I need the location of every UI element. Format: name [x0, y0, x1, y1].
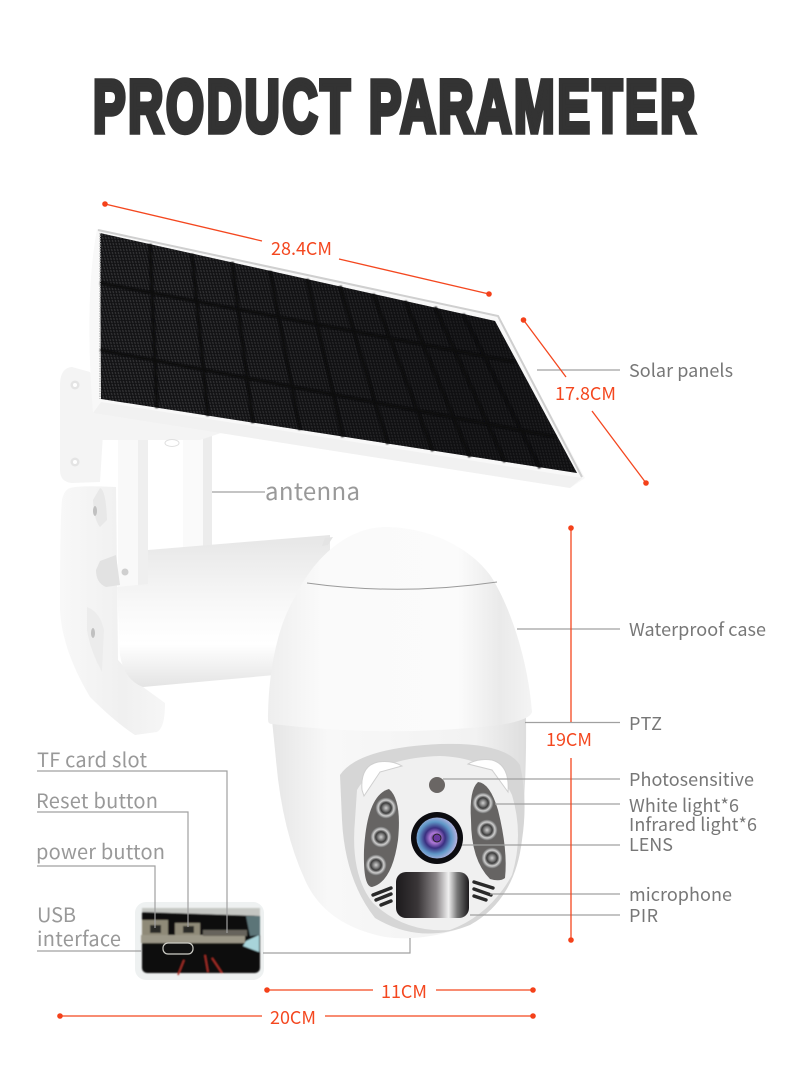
label: Solar panels: Solar panels	[629, 357, 733, 383]
PIR window	[396, 872, 469, 918]
dimension: panel depth 17.8CM: 17.8CM	[555, 380, 616, 406]
camera head	[268, 527, 532, 938]
buttons and slot	[142, 920, 247, 936]
solar cells	[100, 233, 577, 473]
label: USB interface: USB	[37, 899, 76, 928]
leader lines	[37, 370, 620, 953]
left LED strip	[364, 789, 399, 887]
photosensitive sensor	[429, 777, 445, 793]
dimension: height 19CM: 19CM	[546, 726, 592, 752]
face recess	[340, 744, 525, 934]
right LED strip	[471, 782, 506, 880]
dimension: panel depth 17.8CM	[521, 317, 649, 486]
dimension: total width 20CM	[57, 1004, 536, 1030]
antenna and pole	[100, 410, 230, 590]
label: White light: White light*6	[629, 792, 739, 818]
dimension: head width 11CM: 11CM	[381, 978, 427, 1004]
label: PIR: PIR	[629, 902, 658, 928]
label: microphone: microphone	[629, 881, 732, 907]
label: antenna: antenna	[265, 472, 360, 507]
dimension: head width 11CM	[264, 978, 536, 1004]
label: Reset button: Reset button	[36, 785, 158, 814]
wires	[178, 955, 222, 975]
label: Infrared light: Infrared light*6	[629, 811, 757, 837]
label: LENS: LENS	[629, 831, 673, 857]
lower body	[272, 718, 526, 938]
label: TF card slot: TF card slot	[37, 744, 147, 773]
wall plate	[60, 367, 104, 483]
USB port close-up photo	[135, 902, 264, 980]
USB-C connector	[163, 943, 193, 954]
camera mounting bracket	[60, 367, 330, 735]
U-shaped arm	[60, 486, 165, 735]
dome shell	[268, 527, 532, 731]
label: Photosensitive: Photosensitive	[629, 766, 754, 792]
label: USB interface: interface	[37, 923, 121, 952]
dimension: total width 20CM: 20CM	[270, 1004, 316, 1030]
solar panel	[89, 229, 585, 488]
horizontal tube	[117, 535, 330, 687]
label: Waterproof case: Waterproof case	[629, 616, 766, 642]
panel frame	[89, 229, 585, 488]
microphone slots	[373, 882, 493, 905]
label: power button: power button	[36, 836, 165, 865]
light blue cable	[243, 935, 259, 952]
dimension: panel width 28.4CM	[102, 201, 492, 297]
label: PTZ: PTZ	[629, 710, 662, 736]
lens	[411, 812, 463, 864]
label: USB interface	[37, 899, 121, 952]
dimension: height 19CM	[546, 525, 592, 943]
circuit board	[141, 935, 245, 943]
dimension: panel width 28.4CM: 28.4CM	[271, 235, 332, 261]
